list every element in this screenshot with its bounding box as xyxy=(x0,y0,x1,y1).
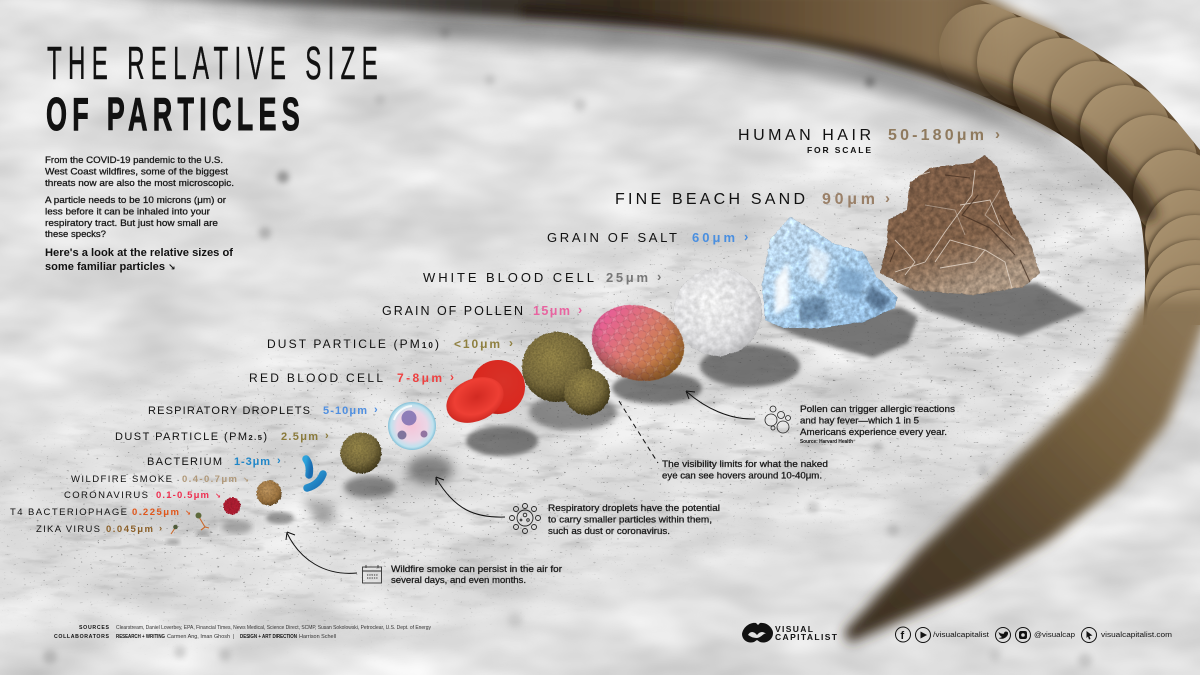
callout text: droplets xyxy=(548,503,720,536)
footer credits: Harrison Schell xyxy=(299,634,336,640)
label: T4 bacteriophage xyxy=(10,507,191,518)
label: dust particle PM10 xyxy=(267,336,513,351)
callout text: visibility: The visibility limits for what the naked xyxy=(662,459,828,469)
label: fine beach sand xyxy=(615,190,890,208)
callout text: pollen xyxy=(800,404,955,445)
label: grain of pollen xyxy=(382,303,582,318)
label: zika virus: 0.045μm xyxy=(106,524,153,535)
intro text: some familiar particles xyxy=(45,261,165,273)
footer credits: SOURCES xyxy=(79,625,110,631)
label: respiratory droplets: RESPIRATORY DROPLETS xyxy=(148,405,310,417)
callout text: pollen: Americans experience every year. xyxy=(800,427,947,437)
label: bacterium: 1-3μm xyxy=(234,456,270,468)
callout text: droplets: such as dust or coronavirus. xyxy=(548,526,670,536)
callout: respiratory droplets xyxy=(436,477,720,536)
label: zika virus: ZIKA VIRUS xyxy=(36,524,100,535)
icon: logo mark xyxy=(742,623,773,643)
label: white blood cell xyxy=(423,269,661,285)
particle: T4 bacteriophage xyxy=(196,512,209,530)
intro text: these specks? xyxy=(45,229,106,239)
label: T4 bacteriophage: 0.225μm xyxy=(132,507,179,518)
intro text: ↘ xyxy=(168,263,176,273)
footer credits: DESIGN + ART DIRECTION xyxy=(240,634,297,640)
label: human hair: 50-180μm xyxy=(888,127,984,144)
logo: Visual Capitalist xyxy=(742,623,838,643)
label: red blood cell: 7-8μm xyxy=(397,371,442,385)
particle shadows xyxy=(166,283,1087,545)
hair: blurred lower section xyxy=(843,300,1200,643)
callout text: smoke xyxy=(391,564,562,585)
label: bacterium: BACTERIUM xyxy=(147,456,222,468)
label: grain of salt: 60μm xyxy=(692,230,735,245)
callout text: droplets: to carry smaller particles within them, xyxy=(548,514,712,524)
text: website: visualcapitalist.com xyxy=(1101,632,1172,639)
callout text: pollen: Source: Harvard Health xyxy=(800,439,853,445)
label: wildfire smoke: ↘ xyxy=(243,476,249,484)
label: white blood cell: 25μm xyxy=(606,270,648,285)
label: wildfire smoke: WILDFIRE SMOKE xyxy=(71,474,172,485)
icon: website cursor xyxy=(1082,628,1096,642)
intro text: A particle needs to be 10 microns (μm) or xyxy=(45,195,226,205)
icon: facebook xyxy=(896,627,910,642)
intro text: threats now are also the most microscopic. xyxy=(45,178,234,188)
label: dust particle PM2.5 xyxy=(115,430,329,443)
label: grain of pollen: › xyxy=(578,303,582,317)
icon: pollen bubbles xyxy=(765,406,790,433)
icon: facebook: f xyxy=(900,630,904,642)
callout: visibility limit xyxy=(619,401,828,480)
label: red blood cell: RED BLOOD CELL xyxy=(249,371,383,385)
label: T4 bacteriophage: ↘ xyxy=(185,509,191,517)
hair: blurred far section along the top xyxy=(80,0,1060,135)
callout text: smoke: several days, and even months. xyxy=(391,575,526,585)
label: white blood cell: WHITE BLOOD CELL xyxy=(423,270,594,285)
label: respiratory droplets xyxy=(148,404,378,417)
arrow: smoke callout xyxy=(286,532,357,573)
logo: Visual Capitalist: CAPITALIST xyxy=(775,632,838,642)
label: coronavirus xyxy=(64,490,221,501)
title: OF PARTICLES xyxy=(46,88,305,140)
label: coronavirus: CORONAVIRUS xyxy=(64,490,148,501)
logo: Visual Capitalist: VISUAL xyxy=(775,624,813,634)
footer credits: RESEARCH + WRITING xyxy=(116,634,165,640)
callout: wildfire smoke xyxy=(286,532,562,585)
label: bacterium: › xyxy=(277,455,281,467)
footer credits: | xyxy=(233,634,234,640)
text: visualcap handle: @visualcap xyxy=(1034,632,1075,639)
text: visualcapitalist handle: /visualcapitalist xyxy=(933,632,989,639)
particle: red blood cells xyxy=(439,360,525,432)
callout: pollen xyxy=(686,391,955,445)
callout text: visibility xyxy=(662,459,828,480)
particle: wildfire smoke xyxy=(256,480,282,506)
label: grain of salt: › xyxy=(744,229,748,244)
label: grain of salt: GRAIN OF SALT xyxy=(547,230,677,245)
label: dust particle PM10: <10μm xyxy=(454,337,500,351)
intro text: respiratory tract. But just how small are xyxy=(45,218,218,228)
label: grain of pollen: 15μm xyxy=(533,304,570,318)
icon: virus xyxy=(510,504,540,534)
label: dust particle PM2.5: DUST PARTICLE (PM2.5) xyxy=(115,431,267,443)
label: dust particle PM10: DUST PARTICLE (PM 10) xyxy=(267,337,439,351)
callout text: visibility: eye can see hovers around 10-40μm. xyxy=(662,470,822,480)
label: human hair: FOR SCALE xyxy=(807,145,871,155)
label: dust particle PM2.5: 2.5μm xyxy=(281,431,318,443)
intro text: less before it can be inhaled into your xyxy=(45,206,210,216)
label: T4 bacteriophage: T4 BACTERIOPHAGE xyxy=(10,507,127,518)
label: respiratory droplets: › xyxy=(374,404,378,416)
label: human hair: HUMAN HAIR xyxy=(738,127,871,144)
label: human hair xyxy=(738,126,1000,155)
label: zika virus: › xyxy=(159,523,162,534)
callout text: droplets: Respiratory droplets have the potential xyxy=(548,503,720,513)
hair: in-focus scaled section xyxy=(940,0,1200,325)
callout text: pollen: Pollen can trigger allergic reactions xyxy=(800,404,955,414)
particle: grain of pollen xyxy=(582,293,694,393)
label: white blood cell: › xyxy=(657,269,661,284)
particle: bacterium xyxy=(306,459,323,488)
particle: white blood cell xyxy=(674,268,762,356)
social links xyxy=(896,627,1172,642)
label: fine beach sand: › xyxy=(885,190,890,207)
particle: fine beach sand xyxy=(880,155,1040,295)
callout text: pollen: and hay fever—which 1 in 5 xyxy=(800,416,919,426)
intro text: Here's a look at the relative sizes of xyxy=(45,247,233,259)
label: bacterium xyxy=(147,455,281,468)
shadow of human hair on the surface xyxy=(150,6,1128,495)
footer credits: Clearstream, Daniel Loverbey, EPA, Financial Times, News Medical, Science Direct, SCMP, Susan Sokolowski, Petroclear, U.S. Dept. of Energy xyxy=(116,625,431,631)
label: respiratory droplets: 5-10μm xyxy=(323,405,367,417)
particle: dust PM10 xyxy=(522,332,610,415)
particle: coronavirus xyxy=(224,498,240,514)
label: wildfire smoke xyxy=(71,474,249,485)
label: grain of salt xyxy=(547,229,748,245)
footer credits: Carmen Ang, Iman Ghosh xyxy=(167,634,230,640)
icon: youtube xyxy=(916,628,930,642)
callout text: smoke: Wildfire smoke can persist in the air for xyxy=(391,564,562,574)
label: red blood cell xyxy=(249,370,454,385)
footer credits xyxy=(54,625,431,640)
label: zika virus xyxy=(36,523,162,535)
particle: grain of salt xyxy=(762,217,897,328)
label: wildfire smoke: 0.4-0.7μm xyxy=(182,474,237,485)
label: fine beach sand: FINE BEACH SAND xyxy=(615,191,805,208)
label: grain of pollen: GRAIN OF POLLEN xyxy=(382,304,523,318)
intro text xyxy=(45,155,234,273)
intro text: From the COVID-19 pandemic to the U.S. xyxy=(45,155,223,165)
label: fine beach sand: 90μm xyxy=(822,191,875,208)
intro text: West Coast wildfires, some of the biggest xyxy=(45,166,228,176)
icon: twitter xyxy=(996,628,1010,642)
arrow: droplets callout xyxy=(436,477,505,517)
dashed line: naked eye limit xyxy=(619,401,658,463)
particle: zika virus xyxy=(171,525,178,534)
icon: calendar xyxy=(362,565,382,583)
title: THE RELATIVE SIZE xyxy=(47,37,384,89)
footer credits: COLLABORATORS xyxy=(54,634,110,640)
label: coronavirus: 0.1-0.5μm xyxy=(156,490,209,501)
icon: instagram xyxy=(1016,628,1030,642)
particle: dust PM2.5 xyxy=(340,432,382,474)
label: human hair: › xyxy=(995,126,1000,143)
title xyxy=(46,37,384,140)
particle: respiratory droplet xyxy=(388,402,436,450)
label: coronavirus: ↘ xyxy=(215,492,221,500)
label: dust particle PM2.5: › xyxy=(325,430,329,442)
label: dust particle PM10: › xyxy=(509,336,513,350)
arrow: pollen callout xyxy=(686,391,755,419)
label: red blood cell: › xyxy=(450,370,454,384)
